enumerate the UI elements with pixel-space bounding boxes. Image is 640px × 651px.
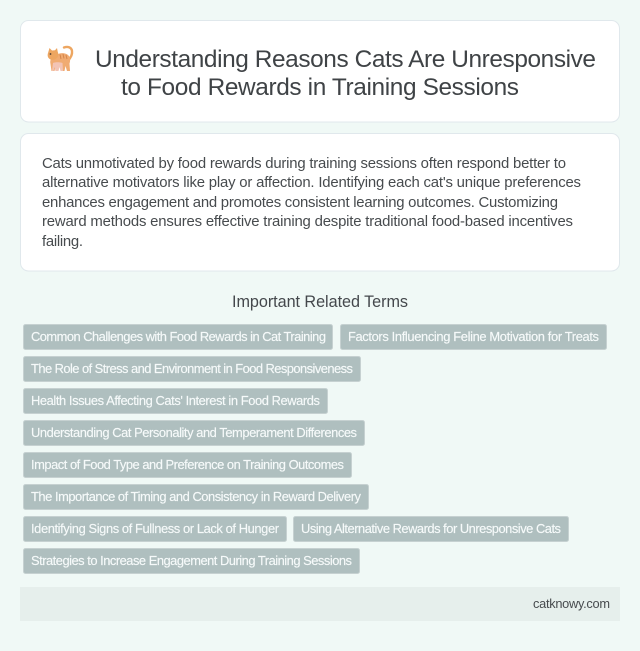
heading: title: Understanding Reasons Cats Are Unresponsive — [95, 46, 596, 73]
chip: Health Issues Affecting Cats' Interest in Food Rewards — [31, 393, 320, 408]
footer — [20, 587, 620, 621]
heading: title — [95, 46, 596, 101]
panel: title card — [20, 20, 620, 122]
chip — [24, 452, 352, 478]
chip — [24, 356, 360, 382]
chip — [24, 420, 364, 446]
chip — [340, 324, 606, 350]
panel: related terms chips — [24, 324, 606, 574]
chip: Strategies to Increase Engagement During Training Sessions — [31, 553, 352, 568]
chip: Understanding Cat Personality and Temperament Differences — [31, 425, 357, 440]
chip: Factors Influencing Feline Motivation for Treats — [348, 329, 599, 344]
text block: description: enhances engagement and promotes consistent learning outcomes. Customizing — [42, 195, 558, 211]
chip: The Role of Stress and Environment in Food Responsiveness — [31, 361, 353, 376]
heading: title: to Food Rewards in Training Sessions — [121, 74, 519, 101]
text block: description: failing. — [42, 234, 83, 250]
chip: Using Alternative Rewards for Unresponsive Cats — [301, 521, 561, 536]
panel: description card — [20, 134, 620, 271]
text block: description: Cats unmotivated by food rewards during training sessions often respond better to — [42, 156, 566, 172]
chip: Impact of Food Type and Preference on Training Outcomes — [31, 457, 344, 472]
text block: description: reward methods ensures effective training despite traditional food-based incentives — [42, 214, 573, 230]
chip: Identifying Signs of Fullness or Lack of Hunger — [31, 521, 280, 536]
chip — [24, 324, 332, 350]
text block: description: alternative motivators like play or affection. Identifying each cat's unique preferences — [42, 175, 581, 191]
chip — [24, 516, 286, 542]
text block: description — [42, 156, 581, 250]
chip — [294, 516, 568, 542]
chip: Common Challenges with Food Rewards in Cat Training — [31, 329, 326, 344]
icon: cat — [48, 47, 72, 71]
chip — [24, 484, 368, 510]
heading: important related terms: Important Related Terms — [232, 293, 408, 311]
footer source text: catknowy.com — [533, 596, 610, 611]
chip — [24, 548, 360, 574]
chip — [24, 388, 328, 414]
chip: The Importance of Timing and Consistency in Reward Delivery — [31, 489, 362, 504]
